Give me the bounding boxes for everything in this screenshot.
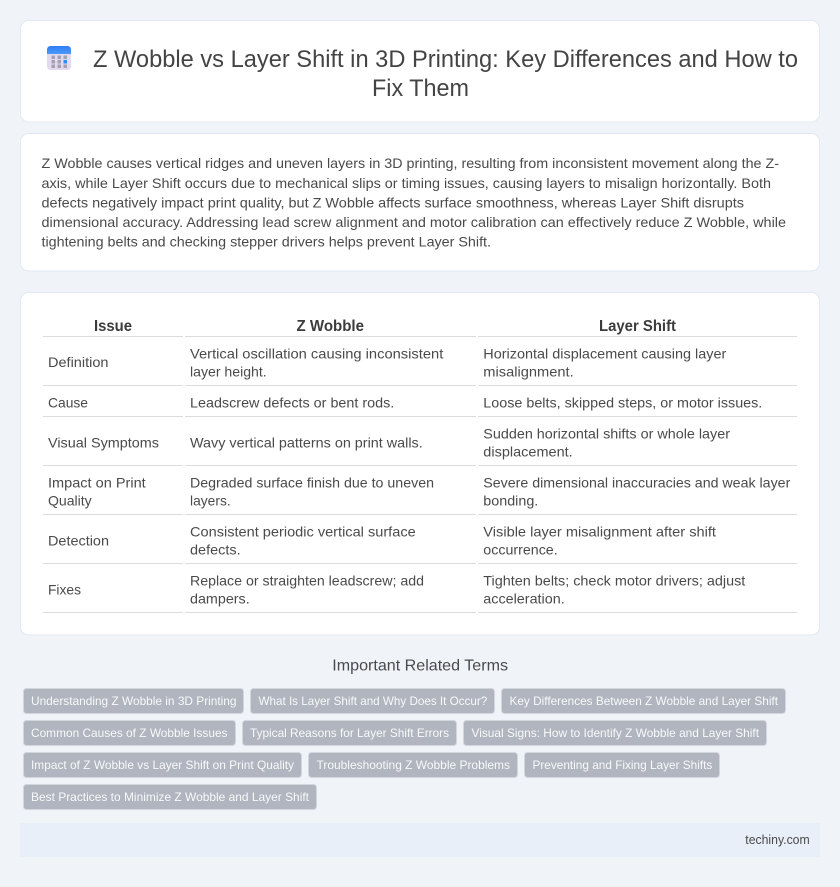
table row: impact on print quality: Impact on Print: [48, 474, 146, 490]
table header row: Layer Shift: [599, 318, 676, 335]
table row: fixes: [48, 572, 745, 606]
chip row 1: What Is Layer Shift and Why Does It Occur?: [258, 694, 488, 708]
table row: visual symptoms: displacement.: [483, 444, 573, 460]
chip row 2: Visual Signs: How to Identify Z Wobble and Layer Shift: [472, 726, 760, 740]
panel: related term chips: [24, 688, 786, 810]
text block: summary paragraph: tightening belts and checking stepper drivers helps prevent Layer Shift.: [42, 234, 491, 250]
table row: definition: Definition: [48, 354, 108, 370]
table row: definition: Vertical oscillation causing inconsistent: [190, 345, 443, 361]
table row: detection: Consistent periodic vertical surface: [190, 523, 416, 539]
table row: fixes: Replace or straighten leadscrew; add: [190, 572, 424, 588]
table header row: Z Wobble: [296, 318, 364, 335]
chip row 1: Key Differences Between Z Wobble and Layer Shift: [510, 694, 779, 708]
heading: important related terms: Important Related Terms: [332, 658, 508, 675]
panel: comparison table: [20, 292, 820, 635]
text block: summary paragraph: [42, 155, 786, 250]
table row: definition: layer height.: [190, 364, 267, 380]
footer: [20, 823, 820, 857]
table row: detection: [48, 523, 716, 558]
text block: summary paragraph: Z Wobble causes vertical ridges and uneven layers in 3D printing, resulting from inconsistent movement along the Z-: [42, 155, 779, 171]
title: Z Wobble vs Layer Shift in 3D Printing: Key Differences and How to: [93, 46, 798, 73]
table row: cause: Cause: [48, 394, 88, 410]
table row: impact on print quality: bonding.: [483, 492, 538, 508]
table row: fixes: acceleration.: [483, 590, 565, 606]
chip row 3: Impact of Z Wobble vs Layer Shift on Print Quality: [31, 758, 294, 772]
table row: fixes: Fixes: [48, 581, 81, 597]
table row: definition: Horizontal displacement causing layer: [483, 345, 727, 361]
table row: detection: defects.: [190, 542, 241, 558]
table row: detection: Visible layer misalignment after shift: [483, 523, 716, 539]
chip row 3: Preventing and Fixing Layer Shifts: [532, 758, 712, 772]
icon: calendar: [47, 46, 71, 70]
table row: definition: [48, 345, 727, 380]
table row: detection: occurrence.: [483, 542, 558, 558]
table row: visual symptoms: Sudden horizontal shifts or whole layer: [483, 425, 730, 441]
table row: impact on print quality: Severe dimensional inaccuracies and weak layer: [483, 474, 791, 490]
table row: impact on print quality: Quality: [48, 492, 92, 508]
chip row 4: Best Practices to Minimize Z Wobble and Layer Shift: [31, 790, 310, 804]
table row: cause: [48, 394, 762, 410]
panel: introduction: [20, 134, 820, 271]
table row: detection: Detection: [48, 532, 109, 548]
chip row 2: [24, 720, 766, 746]
text block: summary paragraph: axis, while Layer Shift occurs due to mechanical slips or timing issues, causing layers to misalign horizontally. Both: [42, 175, 771, 191]
title: [93, 46, 798, 102]
table row: definition: misalignment.: [483, 364, 574, 380]
chip row 3: [24, 752, 720, 778]
table row: fixes: dampers.: [190, 590, 250, 606]
title: Fix Them: [372, 75, 469, 102]
chip row 1: Understanding Z Wobble in 3D Printing: [31, 694, 236, 708]
chip row 2: Typical Reasons for Layer Shift Errors: [250, 726, 449, 740]
chip row 1: [24, 688, 786, 714]
table row: impact on print quality: Degraded surface finish due to uneven: [190, 474, 434, 490]
text block: summary paragraph: defects negatively impact print quality, but Z Wobble affects surface smoothness, whereas Layer Shift disrupts: [42, 194, 744, 210]
table row: impact on print quality: layers.: [190, 492, 231, 508]
table row: visual symptoms: Wavy vertical patterns on print walls.: [190, 434, 423, 450]
table row: visual symptoms: Visual Symptoms: [48, 434, 159, 450]
chip row 3: Troubleshooting Z Wobble Problems: [316, 758, 510, 772]
table row: cause: Loose belts, skipped steps, or motor issues.: [483, 394, 762, 410]
table row: visual symptoms: [48, 425, 730, 460]
table row: impact on print quality: [48, 474, 791, 508]
panel: header: [20, 20, 820, 122]
text block: summary paragraph: dimensional accuracy. Addressing lead screw alignment and motor calibration can effectively reduce Z Wobble, while: [42, 214, 786, 230]
table row: fixes: Tighten belts; check motor drivers; adjust: [483, 572, 745, 588]
table row: cause: Leadscrew defects or bent rods.: [190, 394, 394, 410]
chip row 4: [24, 784, 316, 810]
footer: techiny.com: [745, 832, 810, 847]
table header row: [94, 318, 676, 335]
chip row 2: Common Causes of Z Wobble Issues: [31, 726, 228, 740]
table header row: Issue: [94, 318, 132, 335]
